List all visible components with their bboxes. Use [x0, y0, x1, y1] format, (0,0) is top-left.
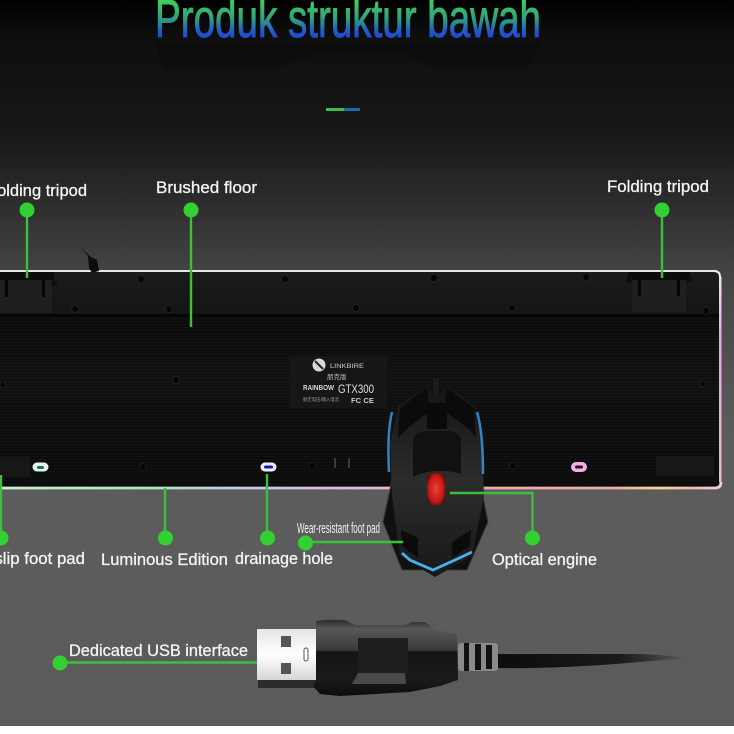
plug shadow	[258, 680, 318, 688]
mouse cable	[433, 378, 439, 404]
highlight panel	[352, 673, 406, 684]
keyboard shell	[0, 271, 721, 488]
lower grips	[401, 530, 418, 558]
title accent bar	[326, 108, 360, 111]
left tripod	[0, 272, 57, 313]
logo panel	[358, 638, 408, 673]
bottom edge glow	[0, 485, 715, 490]
red sensor	[427, 473, 445, 505]
lit drainage hole right	[571, 462, 587, 472]
callout: folding tripod left	[0, 182, 87, 278]
product label sticker: 朋克版	[327, 372, 347, 381]
callout: luminous edition: Luminous Edition	[101, 551, 228, 569]
top edge light	[0, 270, 716, 272]
USB connector	[257, 620, 688, 696]
mesh palm panel	[413, 431, 461, 477]
bottom edge light	[0, 482, 721, 488]
centre strip	[427, 403, 447, 429]
product label sticker: RAINBOW	[303, 385, 334, 392]
callout: dedicated USB interface	[52, 642, 257, 670]
callout: optical engine: Optical engine	[492, 551, 597, 569]
callout: brushed floor	[156, 179, 258, 327]
overmold	[313, 620, 458, 696]
right edge light	[719, 277, 722, 482]
right tripod	[626, 272, 692, 312]
title shadow	[155, 44, 540, 70]
product label sticker: GTX300	[338, 384, 374, 396]
callout: drainage hole: drainage hole	[235, 550, 333, 568]
drainage hole marks	[334, 458, 350, 468]
callout: brushed floor: Brushed floor	[156, 179, 258, 197]
blue light right	[477, 412, 483, 474]
cable stub behind keyboard	[81, 248, 99, 273]
callout: luminous edition	[101, 488, 228, 569]
plug holes	[281, 636, 308, 674]
callout: folding tripod right: Folding tripod	[607, 178, 709, 196]
upper buttons	[398, 388, 429, 438]
metal plug	[257, 629, 317, 680]
keyboard underside	[0, 270, 722, 488]
callout: wear-resistant foot pad	[297, 520, 403, 550]
lit drainage hole left	[32, 462, 48, 472]
cable	[495, 654, 688, 668]
lit drainage hole middle	[260, 462, 276, 472]
product label sticker: 额定电压/输入电流	[303, 396, 339, 403]
blue light bottom	[402, 552, 472, 570]
callout: optical engine	[450, 493, 597, 569]
side wings	[383, 480, 488, 570]
callout: folding tripod right	[607, 178, 709, 278]
product label sticker	[289, 356, 387, 408]
callout: drainage hole	[235, 474, 333, 568]
rubber foot pads	[0, 456, 714, 477]
corner edge light	[714, 271, 720, 277]
screws	[0, 274, 710, 470]
upper panel	[0, 272, 719, 314]
strain relief	[458, 643, 498, 671]
callout: wear-resistant foot pad: Wear-resistant foot pad	[297, 520, 380, 537]
product label sticker: FC CE	[351, 398, 374, 405]
main shell	[390, 385, 484, 577]
brushed texture	[0, 316, 719, 486]
blue light left	[388, 412, 392, 472]
product label sticker: LINKBIRE	[330, 364, 364, 370]
panel groove	[0, 314, 719, 316]
callout: non-slip foot pad	[0, 475, 85, 568]
callout: dedicated USB interface: Dedicated USB interface	[69, 642, 248, 660]
mouse	[383, 378, 488, 577]
